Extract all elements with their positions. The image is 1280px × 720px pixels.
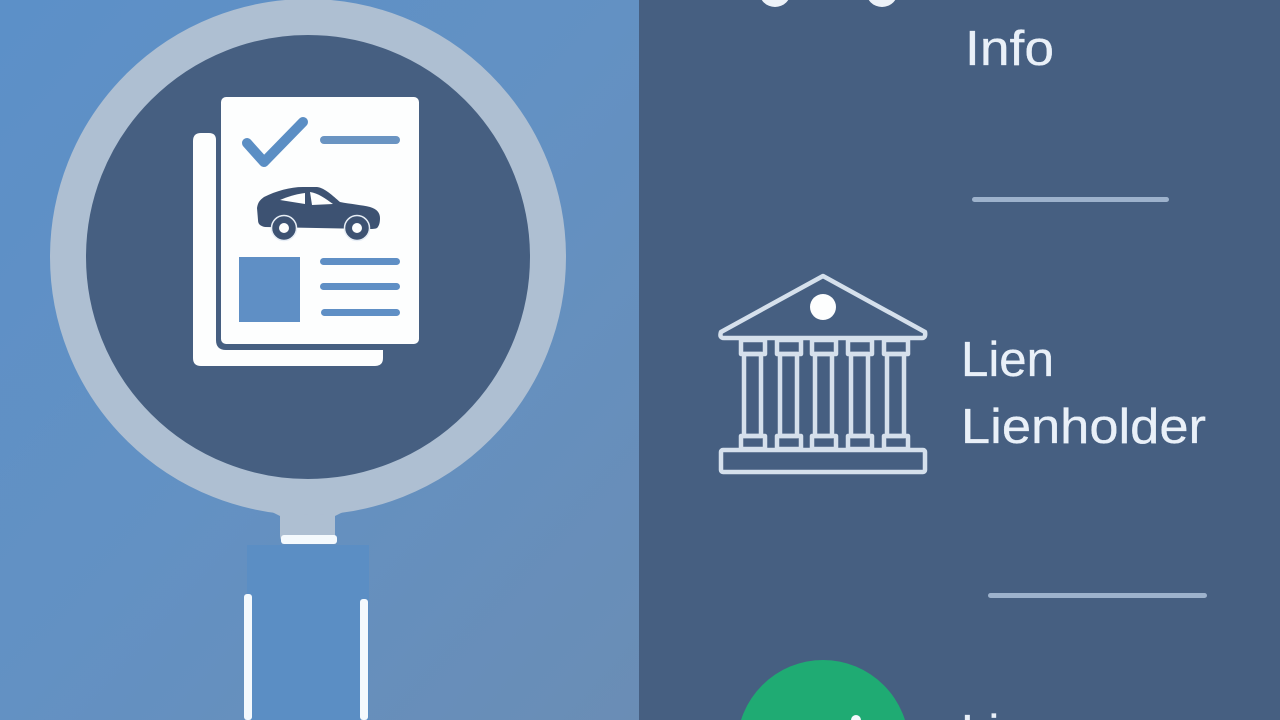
icon: magnifying glass — [68, 17, 548, 720]
icon: car — [257, 187, 380, 240]
text: Lien: Lien — [961, 333, 1054, 387]
magnifier handle — [247, 545, 369, 720]
text line 1 — [320, 258, 400, 265]
divider bottom — [988, 593, 1207, 598]
handle highlight right — [360, 599, 368, 720]
header line — [320, 136, 400, 144]
icon: bank building — [720, 276, 925, 472]
text line 2 — [320, 283, 400, 290]
photo square — [239, 257, 300, 322]
magnifier neck — [272, 500, 343, 544]
panel: left background — [0, 0, 639, 720]
text line 3 — [321, 309, 400, 316]
divider top — [972, 197, 1169, 202]
text: Info: Info — [965, 22, 1054, 76]
icon: green status circle — [737, 660, 909, 720]
back page — [193, 133, 383, 366]
text: Lienholder: Lienholder — [961, 400, 1206, 454]
handle highlight left — [244, 594, 252, 720]
panel: right background — [639, 0, 1280, 720]
icon: vehicle document — [193, 97, 419, 366]
check mark — [247, 122, 303, 162]
neck highlight — [281, 535, 337, 544]
icon: top circles cut off — [759, 0, 898, 7]
magnifier lens — [68, 17, 548, 497]
front page — [221, 97, 419, 344]
